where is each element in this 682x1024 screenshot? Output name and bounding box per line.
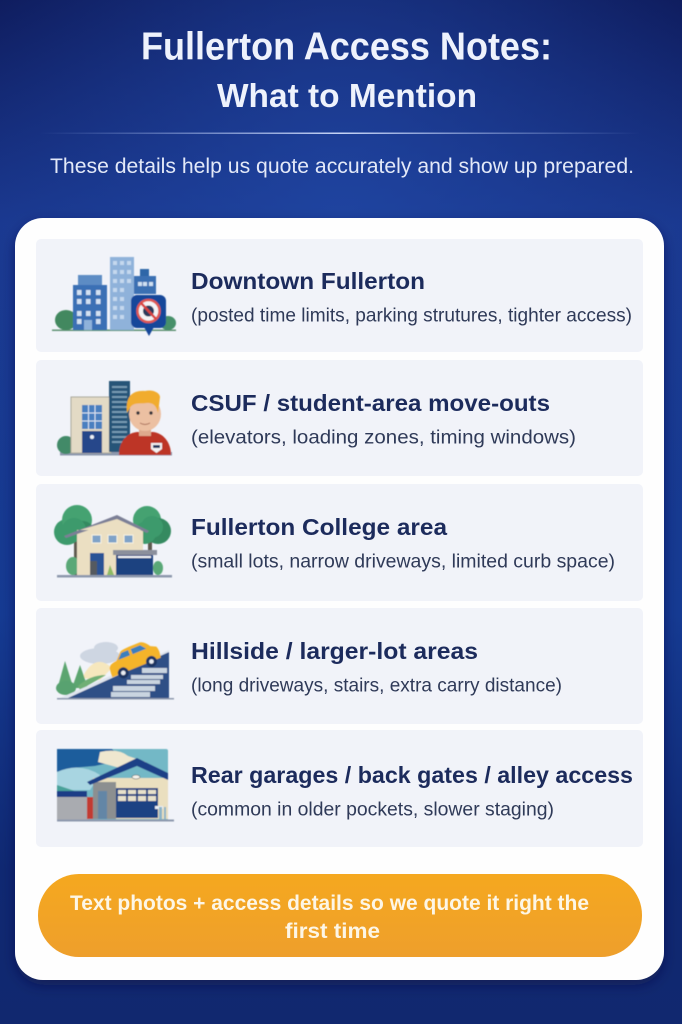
description: (small lots, narrow driveways, limited curb space): [191, 550, 615, 572]
row: CSUF: [36, 360, 643, 476]
title: Fullerton Access Notes:: [141, 26, 552, 68]
heading: Rear garages / back gates / alley access: [191, 762, 633, 788]
call to action button: Text photos + access details so we quote it right the: [70, 891, 589, 915]
heading: CSUF / student-area move-outs: [191, 390, 550, 416]
icon: house with trees: [54, 505, 172, 578]
heading: Hillside / larger-lot areas: [191, 638, 478, 664]
subtitle: These details help us quote accurately and show up prepared.: [50, 154, 634, 178]
row: Rear garages: [36, 730, 643, 847]
call to action button: first time: [285, 919, 380, 943]
title: What to Mention: [217, 78, 477, 115]
description: (common in older pockets, slower staging): [191, 798, 554, 820]
icon: rear garage: [57, 749, 174, 822]
panel: white card: [15, 218, 664, 980]
heading: Fullerton College area: [191, 514, 448, 540]
title: [141, 26, 552, 115]
description: (posted time limits, parking strutures, tighter access): [191, 304, 632, 326]
row: Hillside: [36, 608, 643, 724]
icon: downtown buildings with no-parking pin: [52, 257, 176, 336]
row: Fullerton College: [36, 484, 643, 601]
description: (long driveways, stairs, extra carry distance): [191, 674, 562, 696]
icon: campus building and student: [57, 381, 172, 456]
description: (elevators, loading zones, timing windows): [191, 426, 576, 448]
icon: car on hillside with stairs: [56, 637, 174, 700]
heading: Downtown Fullerton: [191, 268, 425, 294]
call to action button: [38, 874, 642, 957]
row: Downtown Fullerton: [36, 239, 643, 352]
